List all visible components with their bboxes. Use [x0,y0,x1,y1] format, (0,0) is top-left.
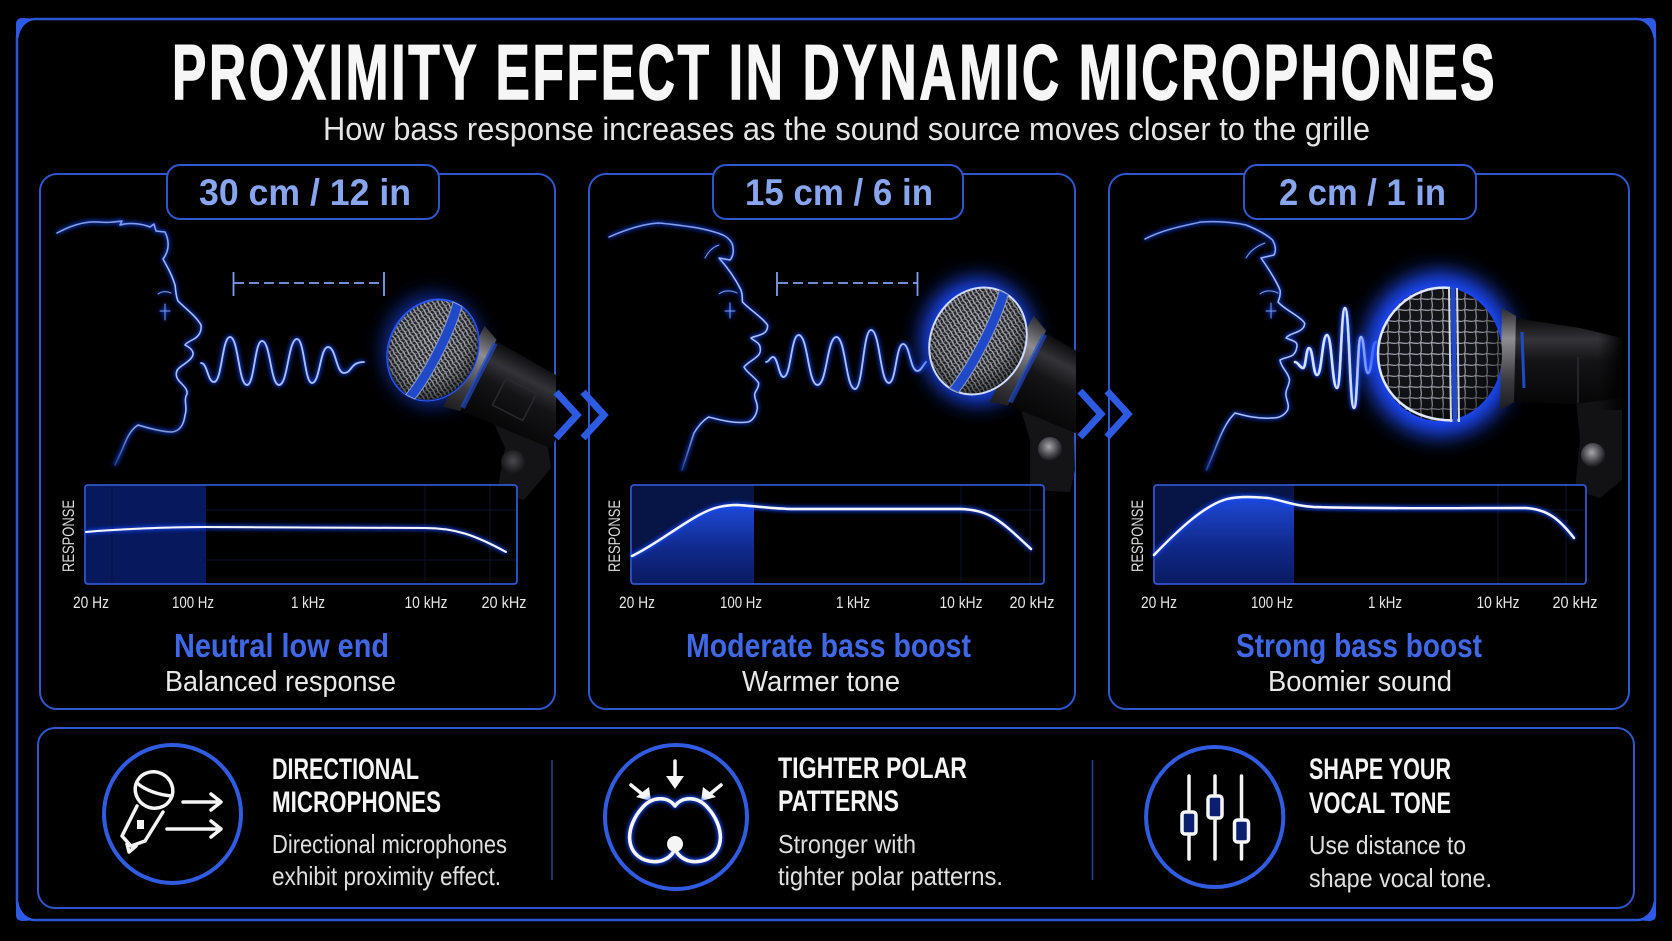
frequency chart 1: 1 kHz [291,593,325,612]
frequency chart 1: 20 kHz [482,593,526,612]
frequency chart 1: 10 kHz [404,593,448,612]
description: Stronger with [778,829,916,859]
icon: sliders [1146,747,1283,887]
tip: tighter polar patterns [605,745,1003,891]
frequency chart 1 [59,485,526,612]
frequency chart 2: RESPONSE [605,500,624,572]
heading: VOCAL TONE [1309,787,1451,820]
heading [272,753,441,819]
description: Directional microphones [272,829,507,859]
frequency chart 3: RESPONSE [1128,500,1147,572]
arrow: chevrons 1 to 2 [556,392,604,438]
heading: TIGHTER POLAR [778,752,967,785]
microphone 3 [1364,272,1624,498]
panel 1 border [40,174,555,709]
caption 1: Balanced response [165,666,396,698]
caption 1 [165,627,396,698]
heading: DIRECTIONAL [272,753,419,786]
tips border [38,728,1634,908]
icon: microphone with arrows [104,745,241,883]
microphone 2 [904,261,1076,492]
icon: polar pattern [605,745,747,889]
panel: 30 cm [40,165,590,709]
distance bracket 2 [777,272,918,296]
frequency chart 2: 20 kHz [1010,593,1054,612]
heading: MICROPHONES [272,786,441,819]
panel: 2 cm [1109,165,1629,709]
sound wave 3 [1295,308,1376,408]
distance tag 30 cm: 30 cm / 12 in [199,172,411,213]
frequency chart 3: 1 kHz [1368,593,1402,612]
caption 1: Neutral low end [174,627,389,664]
description [1309,830,1492,893]
sound wave 1 [201,337,364,385]
panel 3 border [1109,174,1629,709]
head silhouette 2 [609,223,768,470]
frequency chart 2 [605,485,1054,612]
frequency chart 3: 20 kHz [1552,593,1598,612]
subtitle: How bass response increases as the sound source moves closer to the grille [323,111,1370,147]
frequency chart 2: 100 Hz [720,593,762,612]
caption 2: Warmer tone [742,666,900,698]
distance tag 15 cm [713,165,963,219]
caption 3: Strong bass boost [1236,627,1482,664]
frequency chart 2: 10 kHz [940,593,982,612]
caption 2: Moderate bass boost [686,627,971,664]
frequency chart 3 [1128,485,1598,612]
head silhouette 3 [1145,222,1305,470]
heading: SHAPE YOUR [1309,753,1451,786]
head silhouette 1 [57,221,201,465]
frequency chart 3: 10 kHz [1476,593,1520,612]
heading: PATTERNS [778,785,899,818]
description: Use distance to [1309,830,1466,860]
caption 2 [686,627,971,698]
frequency chart 1: 100 Hz [172,593,214,612]
title: PROXIMITY EFFECT IN DYNAMIC MICROPHONES [172,29,1495,117]
frequency chart 2: 20 Hz [619,593,655,612]
panel: 15 cm [588,164,1076,710]
frequency chart 1: RESPONSE [59,500,78,572]
caption 3 [1236,627,1482,698]
sound wave 2 [766,330,926,389]
frequency chart 3: 100 Hz [1251,593,1293,612]
distance tag 15 cm: 15 cm / 6 in [745,172,933,213]
distance tag 30 cm [167,165,439,219]
description: shape vocal tone. [1309,863,1492,893]
heading [1309,753,1451,820]
tip: directional microphones [104,745,507,891]
description: exhibit proximity effect. [272,861,501,891]
caption 3: Boomier sound [1268,666,1452,698]
distance tag 2 cm [1244,165,1476,219]
frequency chart 2: 1 kHz [836,593,870,612]
description [778,829,1003,891]
panel: tips [38,728,1634,908]
heading [778,752,967,818]
frequency chart 1: 20 Hz [73,593,109,612]
distance bracket 1 [234,272,384,296]
distance tag 2 cm: 2 cm / 1 in [1279,172,1446,213]
tip: shape your vocal tone [1146,747,1492,893]
description [272,829,507,891]
panel 2 border [589,174,1075,709]
frequency chart 3: 20 Hz [1141,593,1177,612]
arrow: chevrons 2 to 3 [1080,391,1128,437]
microphone 1 [368,280,556,500]
description: tighter polar patterns. [778,861,1003,891]
